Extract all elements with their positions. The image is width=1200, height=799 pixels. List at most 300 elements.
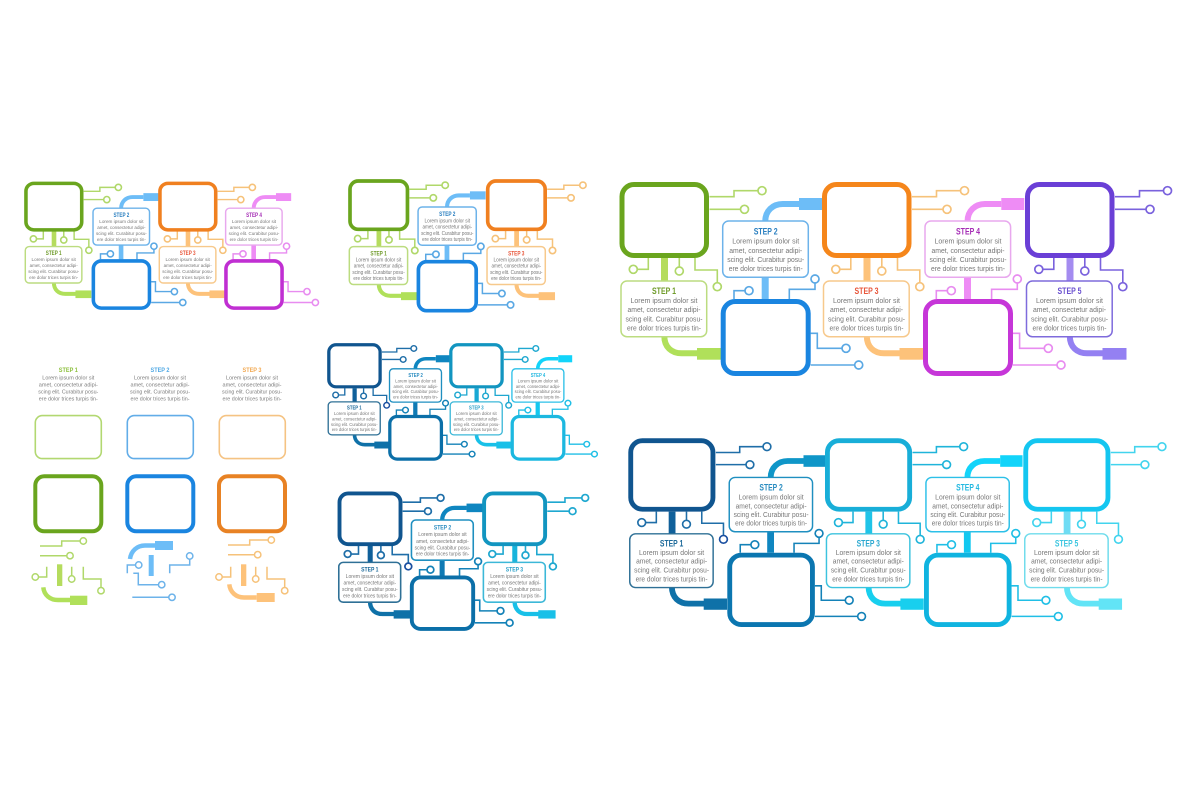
text card (349, 247, 408, 284)
text card: scing elit. Curabitur posu- (415, 545, 470, 551)
connector (867, 336, 924, 360)
text card: ere dolor trices turpis tin- (230, 237, 279, 243)
step 1 navy (328, 345, 417, 448)
text card: scing elit. Curabitur posu- (331, 422, 378, 427)
text card: Lorem ipsum dolor sit (166, 257, 210, 263)
text card (512, 369, 564, 402)
text card: STEP 4 (956, 482, 980, 492)
text card: Lorem ipsum dolor sit (334, 411, 375, 416)
traces (495, 498, 582, 564)
text card (630, 534, 713, 588)
traces (1043, 191, 1164, 283)
text card: ere dolor trices turpis tin- (163, 275, 212, 281)
panel: small blue four steps (328, 345, 597, 459)
step 1 green (349, 181, 448, 300)
text card: scing elit. Curabitur posu- (727, 255, 805, 264)
text card: ere dolor trices turpis tin- (488, 594, 541, 600)
text card: amet, consectetur adipi- (422, 225, 472, 231)
nodes (751, 530, 865, 620)
nodes (32, 538, 104, 594)
connector (370, 602, 411, 619)
bar (241, 564, 246, 586)
step 2 blue (418, 191, 514, 311)
text card (729, 477, 813, 532)
text card (926, 477, 1009, 532)
frame (160, 183, 216, 230)
text card: scing elit. Curabitur posu- (96, 231, 147, 237)
text card: Lorem ipsum dolor sit (1036, 296, 1104, 305)
text card: STEP 4 (956, 226, 981, 238)
stem (512, 546, 517, 562)
nodes (427, 558, 513, 626)
nodes (832, 187, 968, 291)
text card (390, 369, 441, 402)
text card: scing elit. Curabitur posu- (229, 231, 280, 237)
column 2 text: Lorem ipsum dolor sit (134, 375, 187, 381)
text card: ere dolor trices turpis tin- (353, 276, 404, 282)
text card: Lorem ipsum dolor sit (232, 219, 277, 225)
text card: STEP 2 (439, 211, 456, 218)
text card: amet, consectetur adipi- (454, 416, 499, 421)
nodes (1033, 443, 1166, 543)
frame (622, 184, 706, 256)
traces (936, 283, 1057, 365)
nodes (164, 184, 255, 253)
text card: amet, consectetur adipi- (516, 384, 561, 389)
traces (127, 559, 190, 597)
frame (723, 302, 808, 374)
text card: Lorem ipsum dolor sit (99, 219, 144, 225)
text card: ere dolor trices turpis tin- (1031, 574, 1103, 583)
traces (646, 447, 763, 535)
text card (824, 281, 909, 337)
blue parts (127, 541, 193, 600)
text card: scing elit. Curabitur posu- (342, 587, 398, 593)
text card: amet, consectetur adipi- (491, 264, 541, 270)
text card: Lorem ipsum dolor sit (836, 548, 901, 557)
text card: amet, consectetur adipi- (30, 263, 78, 269)
step 2 blue (723, 198, 863, 374)
column 3 text (222, 367, 282, 402)
nodes (492, 182, 586, 254)
text card: scing elit. Curabitur posu- (930, 510, 1006, 519)
text card (418, 207, 476, 245)
step 1 navy (630, 441, 771, 610)
text card: scing elit. Curabitur posu- (515, 389, 562, 394)
text card: amet, consectetur adipi- (1031, 557, 1103, 566)
text card: Lorem ipsum dolor sit (738, 492, 804, 501)
text card (411, 520, 473, 560)
text card: amet, consectetur adipi- (354, 264, 404, 270)
column 2 text: scing elit. Curabitur posu- (130, 390, 190, 396)
text card: Lorem ipsum dolor sit (639, 548, 704, 557)
stem (864, 258, 870, 281)
frame (93, 261, 149, 308)
nodes (240, 243, 318, 306)
text card: ere dolor trices turpis tin- (29, 275, 78, 281)
nodes (835, 443, 968, 543)
text card: STEP 4 (531, 373, 546, 379)
text card: amet, consectetur adipi- (164, 263, 212, 269)
text card: Lorem ipsum dolor sit (425, 218, 471, 224)
bar (57, 564, 62, 586)
traces (351, 498, 438, 564)
stem (413, 402, 417, 415)
nodes (333, 346, 417, 408)
stem (377, 231, 381, 247)
text card: Lorem ipsum dolor sit (456, 411, 497, 416)
nodes (1035, 187, 1172, 291)
step 1 green (621, 184, 766, 360)
column 3 text: STEP 3 (242, 367, 262, 374)
frame (340, 493, 401, 544)
connector (379, 284, 417, 300)
text card: STEP 3 (506, 567, 523, 574)
step 2 deep blue (729, 455, 865, 625)
text card (1026, 281, 1112, 337)
step 3 teal blue (483, 493, 589, 619)
text card: ere dolor trices turpis tin- (830, 323, 904, 332)
text card: Lorem ipsum dolor sit (833, 296, 901, 305)
connector (229, 584, 275, 602)
text card (621, 281, 707, 337)
light frame blue (127, 416, 193, 459)
nodes (947, 275, 1065, 369)
panel: small blue three steps (339, 493, 589, 629)
dark frame green (35, 476, 101, 531)
text card: STEP 1 (46, 250, 62, 257)
column 3 text: amet, consectetur adipi- (222, 382, 282, 388)
text card: amet, consectetur adipi- (830, 305, 903, 314)
text card: STEP 2 (113, 212, 130, 219)
text card: amet, consectetur adipi- (628, 305, 701, 314)
stem (440, 560, 445, 576)
text card: Lorem ipsum dolor sit (518, 378, 559, 383)
stem (964, 277, 971, 299)
connector (54, 283, 91, 298)
text card: scing elit. Curabitur posu- (490, 270, 543, 276)
text card: Lorem ipsum dolor sit (935, 492, 1000, 501)
traces (460, 348, 533, 403)
connector (968, 198, 1024, 221)
stem (474, 388, 479, 402)
nodes (354, 182, 448, 254)
step 3 teal blue (826, 441, 968, 610)
step 2 deep blue (411, 504, 513, 629)
step 3 orange (824, 184, 968, 360)
text card: amet, consectetur adipi- (97, 225, 146, 231)
text card: scing elit. Curabitur posu- (828, 314, 905, 323)
frame (418, 262, 476, 311)
text card: scing elit. Curabitur posu- (734, 510, 809, 519)
nodes (745, 275, 863, 369)
nodes (30, 184, 121, 253)
stem (762, 277, 769, 299)
stem (251, 245, 256, 259)
frame (226, 261, 282, 308)
text card: Lorem ipsum dolor sit (32, 257, 76, 263)
frame (512, 416, 564, 459)
text card (925, 221, 1011, 277)
connector (1070, 336, 1126, 360)
bar (149, 555, 154, 576)
connector (121, 193, 159, 208)
text card: amet, consectetur adipi- (343, 581, 396, 587)
step 4 magenta (925, 198, 1065, 374)
step 3 teal blue (450, 345, 539, 448)
nodes (344, 495, 444, 570)
light frame orange (219, 416, 285, 459)
frame (484, 493, 545, 544)
panel: large colourful five steps (621, 184, 1172, 374)
traces (426, 249, 508, 305)
green parts (32, 538, 104, 605)
traces (100, 249, 180, 303)
column 1 text: amet, consectetur adipi- (39, 382, 98, 388)
step 1 green (25, 183, 121, 298)
connector (869, 587, 924, 610)
text card: STEP 2 (408, 373, 423, 379)
frame (488, 181, 545, 229)
connector (515, 602, 556, 619)
text card: ere dolor trices turpis tin- (332, 427, 377, 432)
text card: ere dolor trices turpis tin- (343, 594, 397, 600)
light frame green (35, 416, 101, 459)
text card: ere dolor trices turpis tin- (454, 427, 499, 432)
text card: STEP 3 (857, 538, 880, 548)
text card: ere dolor trices turpis tin- (729, 264, 803, 273)
frame (631, 441, 713, 509)
traces (36, 187, 116, 248)
column 3 text: Lorem ipsum dolor sit (226, 375, 279, 381)
orange parts (216, 537, 288, 602)
frame (730, 555, 812, 625)
column 2 text: amet, consectetur adipi- (130, 382, 190, 388)
step 4 magenta (226, 193, 318, 308)
text card: STEP 5 (1055, 538, 1078, 548)
traces (519, 406, 592, 454)
stem (964, 531, 971, 553)
nodes (629, 187, 766, 291)
frame (350, 181, 407, 229)
text card: amet, consectetur adipi- (729, 246, 803, 255)
connector (130, 541, 173, 559)
text card: scing elit. Curabitur posu- (930, 255, 1007, 264)
traces (840, 191, 960, 283)
connector (442, 504, 483, 520)
text card: STEP 2 (754, 226, 778, 238)
column 3 text: scing elit. Curabitur posu- (222, 390, 282, 396)
text card: ere dolor trices turpis tin- (932, 519, 1004, 528)
text card: Lorem ipsum dolor sit (934, 237, 1002, 246)
panel: small colourful four steps (25, 183, 318, 308)
frame (926, 302, 1010, 374)
nodes (216, 537, 288, 594)
text card: STEP 3 (469, 406, 484, 412)
connector (415, 355, 450, 369)
column 2 text: ere dolor trices turpis tin- (130, 396, 190, 402)
text card: Lorem ipsum dolor sit (356, 258, 402, 264)
text card: STEP 2 (434, 525, 451, 532)
text card: scing elit. Curabitur posu- (626, 314, 703, 323)
connector (188, 283, 225, 298)
connector (476, 434, 511, 448)
connector (254, 193, 291, 208)
text card: amet, consectetur adipi- (833, 557, 904, 566)
nodes (433, 243, 514, 308)
text card: amet, consectetur adipi- (932, 246, 1005, 255)
traces (39, 541, 101, 587)
nodes (455, 346, 539, 408)
stem (186, 231, 190, 247)
stem (669, 512, 675, 534)
frame (451, 345, 502, 387)
frame (926, 555, 1009, 625)
connector (447, 191, 486, 207)
text card: STEP 1 (361, 567, 379, 574)
stem (865, 512, 872, 534)
traces (637, 191, 758, 283)
step 4 cyan (926, 455, 1062, 625)
text card (826, 534, 910, 588)
text card: STEP 1 (347, 406, 362, 412)
text card: amet, consectetur adipi- (1033, 305, 1106, 314)
traces (420, 564, 507, 623)
step 4 cyan (512, 355, 597, 459)
nodes (403, 400, 475, 457)
text card: ere dolor trices turpis tin- (627, 323, 701, 332)
text card: STEP 2 (759, 482, 783, 492)
text card: scing elit. Curabitur posu- (487, 587, 542, 593)
step 3 orange (159, 183, 255, 298)
text card: scing elit. Curabitur posu- (392, 389, 439, 394)
text card: STEP 1 (370, 250, 387, 257)
column 1 text: Lorem ipsum dolor sit (42, 375, 95, 381)
column 1 text: scing elit. Curabitur posu- (38, 390, 99, 396)
text card: ere dolor trices turpis tin- (516, 394, 561, 399)
text card: scing elit. Curabitur posu- (421, 231, 474, 237)
text card: amet, consectetur adipi- (932, 501, 1004, 510)
text card: amet, consectetur adipi- (416, 539, 469, 545)
traces (734, 283, 855, 365)
text card: ere dolor trices turpis tin- (931, 264, 1005, 273)
traces (338, 348, 411, 403)
text card: amet, consectetur adipi- (736, 501, 807, 510)
text card (328, 402, 380, 435)
text card (226, 208, 282, 245)
text card (450, 402, 502, 435)
text card: amet, consectetur adipi- (636, 557, 708, 566)
text card: Lorem ipsum dolor sit (346, 574, 394, 580)
text card: ere dolor trices turpis tin- (735, 519, 808, 528)
text card: ere dolor trices turpis tin- (491, 276, 542, 282)
frame (1026, 441, 1108, 509)
column 2 text (130, 367, 190, 402)
text card: scing elit. Curabitur posu- (1031, 314, 1108, 323)
text card: amet, consectetur adipi- (332, 416, 377, 421)
nodes (489, 495, 589, 570)
panel: large blue five steps (630, 441, 1166, 625)
stem (514, 231, 519, 247)
stem (352, 388, 357, 402)
traces (222, 540, 285, 587)
stem (1064, 512, 1070, 534)
text card: scing elit. Curabitur posu- (1029, 566, 1105, 575)
nodes (107, 243, 186, 306)
panel: small colourful three steps (349, 181, 586, 311)
text card: ere dolor trices turpis tin- (1032, 323, 1107, 332)
nodes (948, 530, 1062, 620)
traces (233, 249, 313, 303)
stem (368, 546, 373, 562)
connector (765, 198, 822, 221)
traces (396, 406, 470, 454)
frame (824, 184, 909, 256)
traces (498, 185, 580, 248)
connector (43, 587, 87, 605)
text card: STEP 3 (180, 250, 196, 257)
column 1 text: ere dolor trices turpis tin- (39, 396, 98, 402)
dark frame orange (219, 476, 285, 531)
stem (445, 245, 449, 260)
text card: Lorem ipsum dolor sit (493, 258, 540, 264)
text card (339, 562, 401, 602)
text card (25, 247, 82, 283)
text card: scing elit. Curabitur posu- (28, 269, 79, 275)
text card: scing elit. Curabitur posu- (634, 566, 710, 575)
text card (93, 208, 150, 245)
step 2 deep blue (390, 355, 475, 459)
text card: STEP 4 (246, 212, 262, 219)
text card (723, 221, 808, 277)
text card: Lorem ipsum dolor sit (1034, 548, 1099, 557)
stem (767, 531, 774, 553)
step 5 light cyan (1025, 441, 1166, 610)
text card: Lorem ipsum dolor sit (490, 574, 539, 580)
text card: STEP 3 (508, 250, 525, 257)
panel: component kit (32, 367, 288, 605)
text card: amet, consectetur adipi- (230, 225, 278, 231)
stem (536, 402, 540, 415)
text card (487, 247, 545, 284)
text card (483, 562, 545, 602)
dark frame blue (127, 476, 193, 531)
column 2 text: STEP 2 (150, 367, 170, 374)
frame (827, 441, 910, 509)
text card: STEP 5 (1058, 286, 1082, 297)
text card: ere dolor trices turpis tin- (97, 237, 146, 243)
connector (664, 336, 721, 360)
traces (740, 537, 858, 616)
traces (1041, 447, 1158, 535)
stem (1066, 258, 1074, 281)
connector (354, 434, 389, 448)
text card (159, 247, 216, 283)
connector (967, 455, 1023, 477)
text card: Lorem ipsum dolor sit (395, 378, 437, 383)
text card: amet, consectetur adipi- (393, 384, 438, 389)
text card: ere dolor trices turpis tin- (636, 574, 708, 583)
column 1 text: STEP 1 (59, 367, 78, 374)
traces (842, 447, 960, 535)
column 3 text: ere dolor trices turpis tin- (222, 396, 282, 402)
nodes (525, 400, 597, 457)
text card: ere dolor trices turpis tin- (416, 552, 469, 558)
text card: scing elit. Curabitur posu- (453, 422, 500, 427)
text card: STEP 3 (854, 286, 878, 297)
step 5 purple (1026, 184, 1172, 360)
text card: STEP 1 (660, 538, 683, 548)
